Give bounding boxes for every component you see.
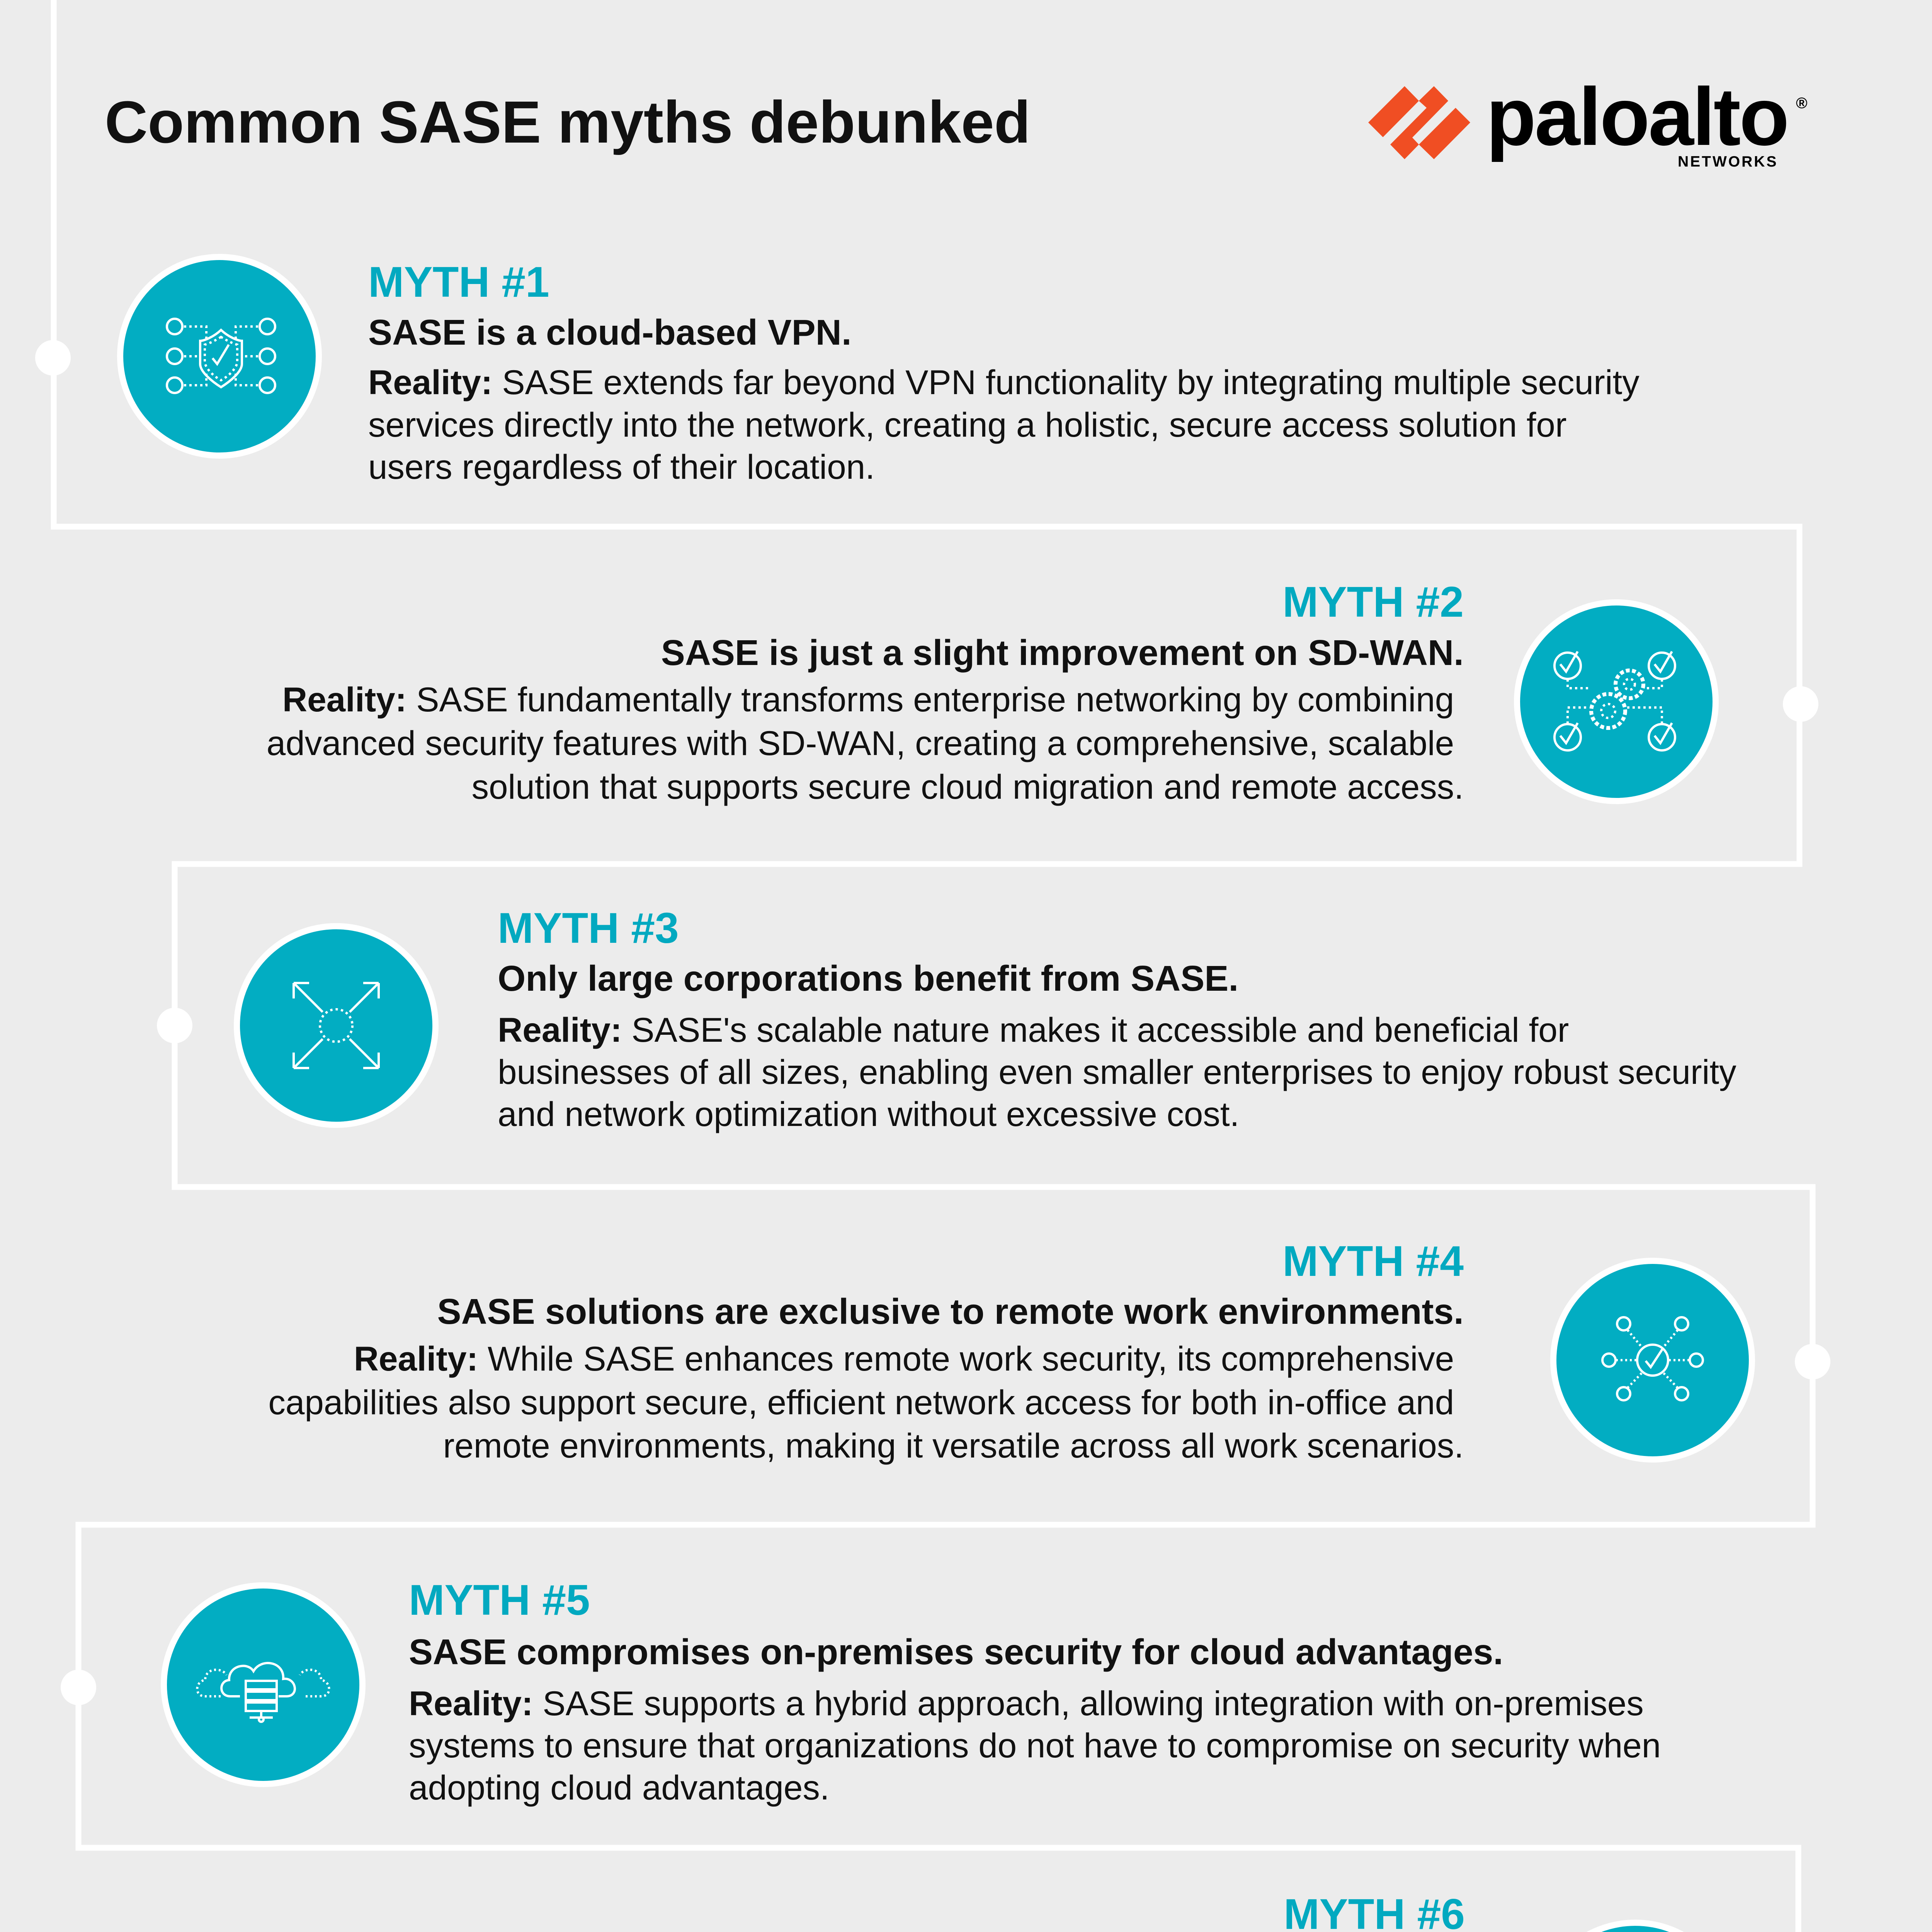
text 3: MYTH #3 [498, 904, 679, 952]
myth 3: Only large corporations benefit from SASE. [498, 958, 1238, 998]
text 4: MYTH #4 [1282, 1237, 1464, 1285]
myth 2 [267, 578, 1716, 806]
myth 5: adopting cloud advantages. [409, 1768, 830, 1807]
icon 2: gears with checks [1517, 602, 1716, 801]
myth 1: users regardless of their location. [368, 447, 875, 486]
logo: palo alto networks: paloalto [1486, 71, 1788, 162]
myth 5: SASE compromises on-premises security for cloud advantages. [409, 1632, 1503, 1672]
myth 3: businesses of all sizes, enabling even smaller enterprises to enjoy robust security [498, 1053, 1736, 1091]
myth 1: SASE is a cloud-based VPN. [368, 312, 852, 352]
icon 3: expanding arrows [237, 926, 435, 1125]
logo: palo alto networks: NETWORKS [1678, 153, 1778, 170]
myth 2: solution that supports secure cloud migration and remote access. [471, 767, 1464, 806]
myth 2: SASE is just a slight improvement on SD-WAN. [661, 633, 1464, 673]
myth 5 [164, 1576, 1670, 1807]
myth 4: Reality: While SASE enhances remote work security, its comprehensive [354, 1339, 1454, 1378]
myth 4 [268, 1237, 1752, 1465]
myth 1 [120, 257, 1649, 486]
myth 1: services directly into the network, creating a holistic, secure access solution for [368, 405, 1567, 444]
myth 3 [237, 904, 1746, 1133]
logo: palo alto networks [1368, 71, 1807, 170]
text 2: MYTH #2 [1282, 578, 1464, 626]
timeline dots [35, 340, 1830, 1932]
myth 3: and network optimization without excessive cost. [498, 1095, 1239, 1133]
text 1: MYTH #1 [368, 258, 549, 306]
myth 4: SASE solutions are exclusive to remote work environments. [437, 1291, 1464, 1332]
title: Common SASE myths debunked [105, 89, 1031, 155]
icon 6: hexagon shield [1536, 1923, 1735, 1932]
myth 2: Reality: SASE fundamentally transforms enterprise networking by combining [282, 680, 1454, 719]
icon 4: network hub [1553, 1261, 1752, 1459]
myth 5: systems to ensure that organizations do not have to compromise on security when [409, 1726, 1661, 1765]
icon 5: cloud server [164, 1585, 362, 1784]
myth 4: capabilities also support secure, efficient network access for both in-office and [268, 1383, 1454, 1422]
text 5: MYTH #5 [409, 1576, 590, 1624]
logo mark [1368, 86, 1470, 159]
myth 6 [129, 1890, 1735, 1932]
myth 1: Reality: SASE extends far beyond VPN functionality by integrating multiple security [368, 363, 1639, 401]
myth 4: remote environments, making it versatile across all work scenarios. [443, 1426, 1464, 1465]
myth 3: Reality: SASE's scalable nature makes it accessible and beneficial for [498, 1010, 1569, 1049]
icon 1: shield network [120, 257, 319, 456]
myth 2: advanced security features with SD-WAN, creating a comprehensive, scalable [267, 724, 1454, 762]
logo: palo alto networks: ® [1796, 95, 1807, 112]
myth 5: Reality: SASE supports a hybrid approach, allowing integration with on-premises [409, 1684, 1644, 1723]
